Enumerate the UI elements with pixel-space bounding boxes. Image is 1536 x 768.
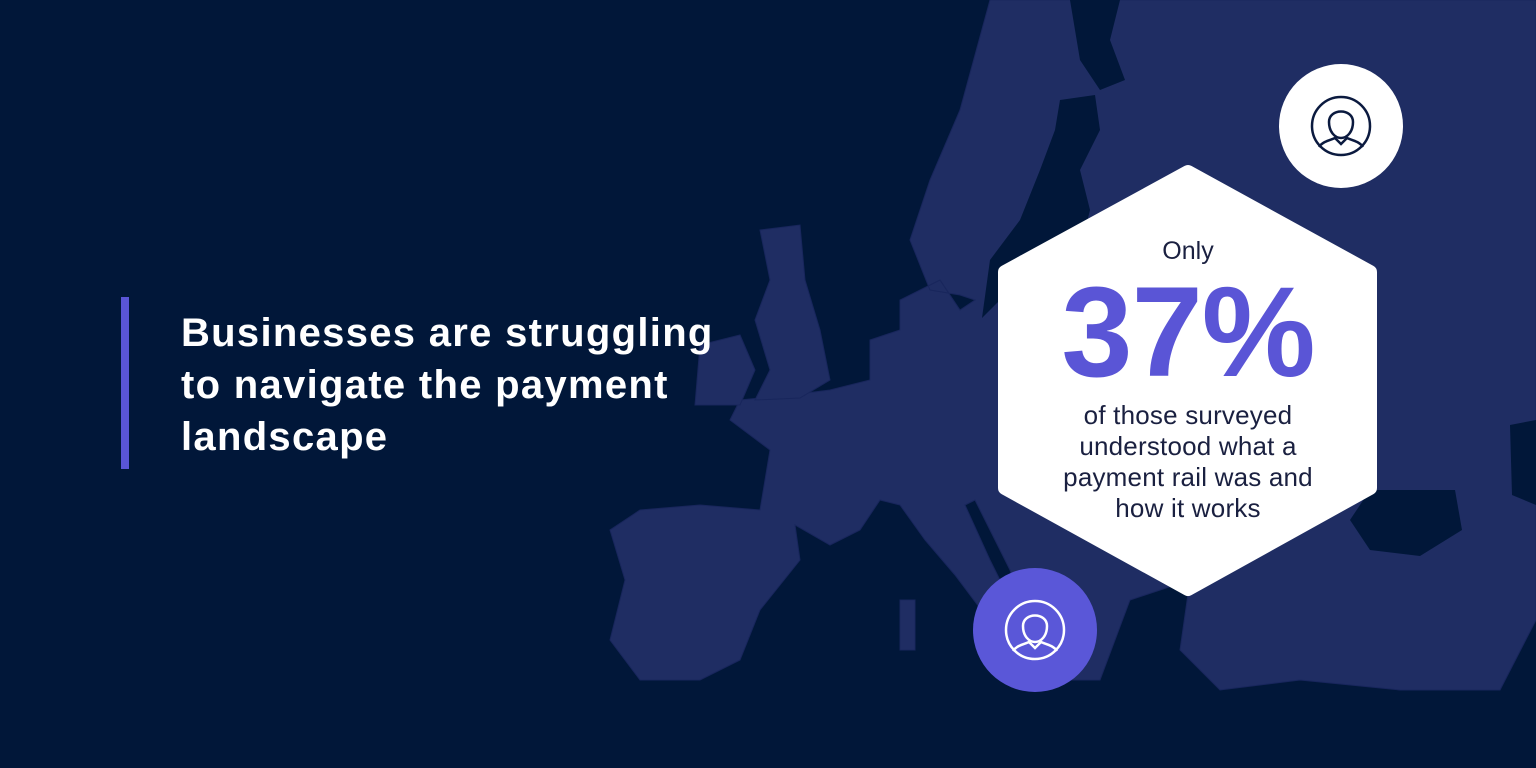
big number: 37% [1061,261,1315,404]
heading: to navigate the payment [181,363,669,407]
description [1063,400,1313,523]
description: of those surveyed [1084,400,1292,430]
icon: person purple circle [973,568,1097,692]
heading [181,311,714,459]
accent bar [121,297,129,469]
description: how it works [1115,493,1261,523]
icon: person white circle [1279,64,1403,188]
heading: landscape [181,415,388,459]
description: understood what a [1079,431,1297,461]
heading: Businesses are struggling [181,311,714,355]
label: only: Only [1162,237,1214,265]
description: payment rail was and [1063,462,1313,492]
seas [982,0,1536,556]
hexagon stat callout [998,165,1377,596]
